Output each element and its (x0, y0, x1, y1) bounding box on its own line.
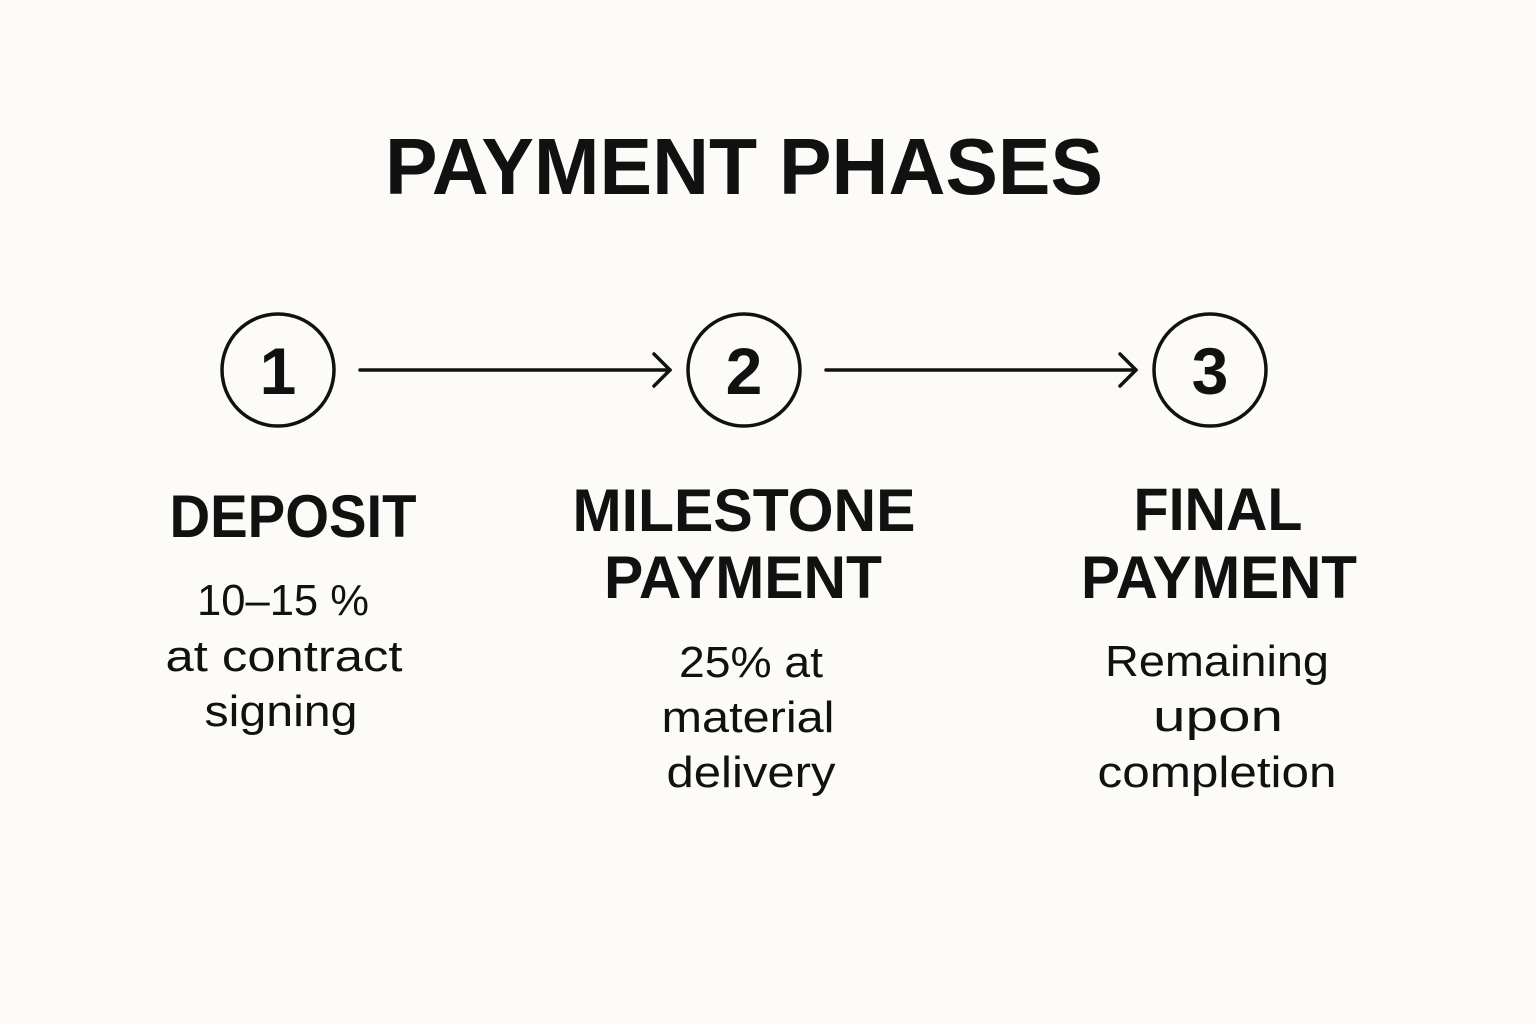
text: deposit details: at contract (166, 632, 402, 681)
text: milestone details (662, 638, 836, 797)
step 1: deposit (166, 314, 416, 736)
step 2: milestone payment (572, 314, 916, 797)
heading: final payment (1081, 476, 1357, 611)
step 3: final payment (1081, 314, 1357, 797)
heading: final payment: FINAL (1134, 476, 1302, 543)
text: final details: upon (1153, 692, 1283, 741)
heading: milestone payment: PAYMENT (604, 544, 882, 611)
text: deposit details: 10–15 % (197, 576, 369, 625)
heading: milestone payment (572, 477, 916, 611)
heading: milestone payment: MILESTONE (572, 477, 916, 544)
text: milestone details: delivery (666, 748, 836, 797)
text: deposit details (166, 576, 402, 736)
text: deposit details: signing (204, 687, 358, 736)
icon: circle 3: 3 (1192, 334, 1228, 408)
text: final details: completion (1098, 748, 1336, 797)
text: milestone details: 25% at (679, 638, 823, 687)
text: final details: Remaining (1105, 637, 1329, 686)
text: final details (1098, 637, 1336, 797)
arrow 2 to 3 (826, 354, 1136, 386)
arrow 1 to 2 (360, 354, 670, 386)
icon: circle 1: 1 (260, 334, 296, 408)
icon: circle 2 (688, 314, 800, 426)
title: PAYMENT PHASES (385, 122, 1103, 211)
icon: circle 2: 2 (726, 334, 762, 408)
heading: deposit: DEPOSIT (170, 483, 416, 550)
icon: circle 1 (222, 314, 334, 426)
heading: final payment: PAYMENT (1081, 544, 1357, 611)
text: milestone details: material (662, 693, 834, 742)
icon: circle 3 (1154, 314, 1266, 426)
